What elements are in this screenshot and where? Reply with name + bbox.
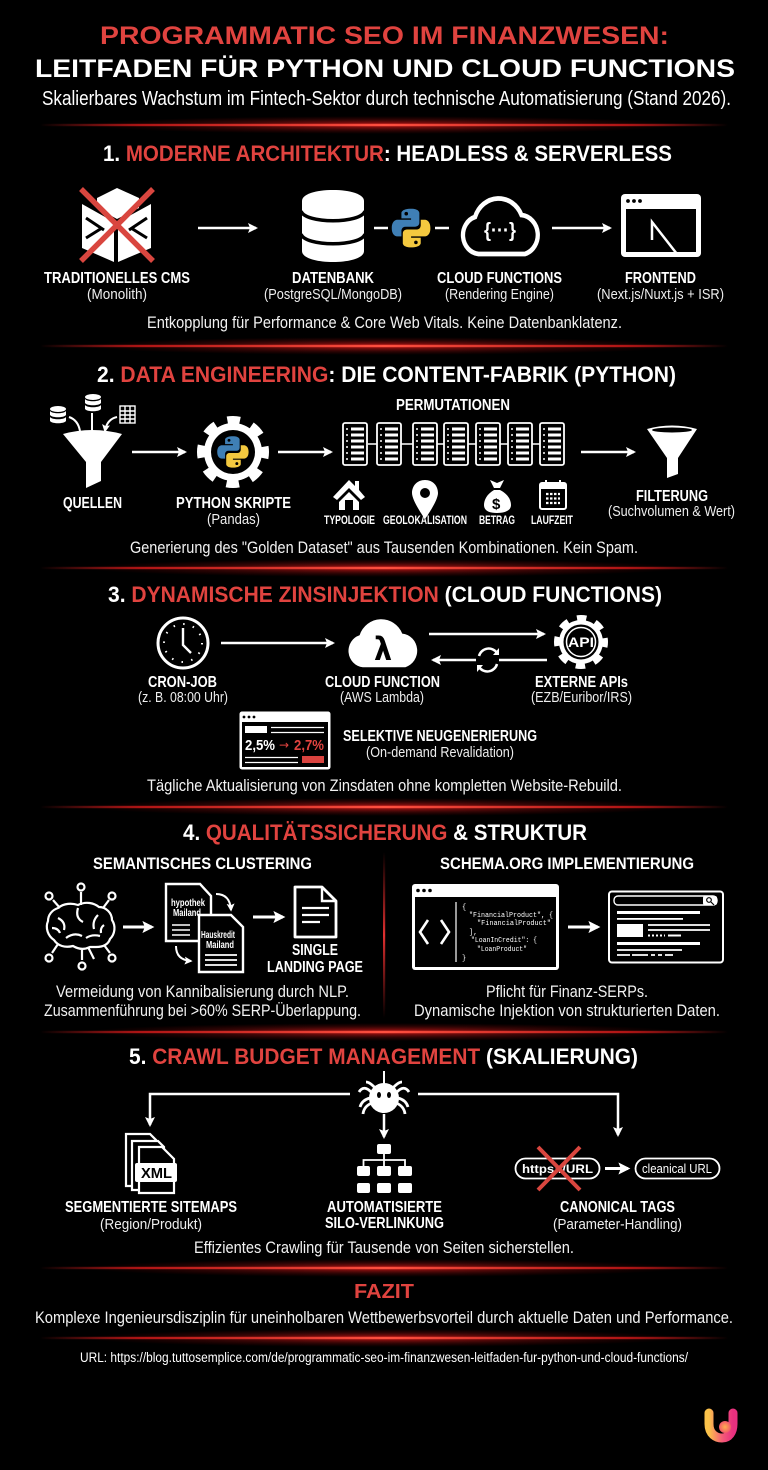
labels: CANONICAL TAGS [560,1199,675,1216]
arrow [198,227,256,229]
text: schema: Dynamische Injektion von strukturierten Daten. [414,1001,720,1020]
labels: (Rendering Engine) [445,287,554,303]
panel: 2 data engineering [50,362,735,557]
icon: search results page [609,892,723,962]
labels: (PostgreSQL/MongoDB) [264,287,402,303]
sub-panel heading: SCHEMA.ORG IMPLEMENTIERUNG [440,854,694,873]
arrow [253,916,283,918]
chart: permutation columns [343,423,564,465]
icon: canonical URL pills: https://URL [522,1162,593,1176]
icon: code browser: ], [469,929,477,937]
labels: (Monolith) [87,287,147,303]
labels: SILO-VERLINKUNG [325,1215,444,1232]
labels: (Parameter-Handling) [553,1217,682,1233]
icon: code browser: "LoanProduct" [477,946,527,954]
labels: (z. B. 08:00 Uhr) [138,690,228,706]
icon: code browser [412,884,559,970]
label: (Suchvolumen & Wert) [608,504,735,520]
labels: (Next.js/Nuxt.js + ISR) [597,287,724,303]
labels: (EZB/Euribor/IRS) [531,690,632,706]
text: clustering [44,982,361,1020]
sub-panel heading: SEMANTISCHES CLUSTERING [93,854,312,873]
labels: AUTOMATISIERTE [327,1199,442,1216]
labels: CLOUD FUNCTION [325,674,440,691]
labels [44,270,724,303]
text: schema: Pflicht für Finanz-SERPs. [486,982,648,1001]
icon: code browser: { [462,904,466,912]
label: LANDING PAGE [267,959,363,976]
panel: 5 crawl budget [65,1044,720,1257]
icon: rate update browser: → [279,738,289,752]
icon: duplicate documents: Hauskredit [201,930,235,941]
labels: FRONTEND [625,270,696,287]
labels: (AWS Lambda) [340,690,424,706]
arrow [568,926,598,928]
icon: calendar [540,480,566,509]
icon: rate update browser: 2,7% [294,738,324,754]
arrow [221,642,333,644]
panel: conclusion [35,1281,733,1327]
icon: database [301,190,365,262]
label: (On-demand Revalidation) [366,745,514,761]
heading 3: 3. DYNAMISCHE ZINSINJEKTION (CLOUD FUNCTIONS) [108,582,662,607]
icon: duplicate documents: hypothek [171,898,205,909]
labels: CRON-JOB [148,674,217,691]
icon: location pin [412,480,438,519]
icon: canonical URL pills [516,1147,720,1190]
summary text: Entkopplung für Performance & Core Web Vitals. Keine Datenbanklatenz. [147,313,622,332]
arrow [552,227,610,229]
heading 4: 4. QUALITÄTSSICHERUNG & STRUKTUR [183,820,587,845]
icon: single document [295,887,336,937]
labels [138,674,632,706]
icon: code browser: } [462,955,466,963]
panel: 4 quality and structure [44,820,723,1020]
labels: SEGMENTIERTE SITEMAPS [65,1199,237,1216]
icon: clock [158,618,208,668]
arrows: API exchange [429,634,547,672]
label: SINGLE [292,942,338,959]
heading 5: 5. CRAWL BUDGET MANAGEMENT (SKALIERUNG) [129,1044,638,1069]
heading: Fazit: FAZIT [354,1281,414,1303]
summary text: Effizientes Crawling für Tausende von Seiten sicherstellen. [194,1238,574,1257]
permutation labels: BETRAG [479,513,515,527]
label: (Pandas) [207,512,260,528]
label: QUELLEN [63,495,122,512]
title: PROGRAMMATIC SEO IM FINANZWESEN: [100,22,669,50]
icon: cloud functions [463,198,538,254]
arrow [278,451,331,453]
icon: rate update browser: 2,5% [245,738,275,754]
icon: lambda cloud: λ [374,630,392,668]
permutation labels: LAUFZEIT [531,513,573,527]
title: LEITFADEN FÜR PYTHON UND CLOUD FUNCTIONS [35,54,735,83]
icon: code browser: "FinancialProduct", { [469,912,553,920]
arrow: right branch [418,1094,618,1135]
connector line [374,227,449,229]
icon: API gear [558,619,604,665]
title [35,22,735,83]
heading 2: 2. DATA ENGINEERING: DIE CONTENT-FABRIK (PYTHON) [97,362,676,387]
labels [65,1199,682,1233]
arrow [123,926,152,928]
label: SELEKTIVE NEUGENERIERUNG [343,728,537,745]
permutation labels: GEOLOKALISATION [383,513,467,527]
icon: crossed monolith CMS [81,188,153,262]
icon: frontend browser [621,194,701,257]
icon: python logo [392,209,430,247]
labels: (Region/Produkt) [100,1217,202,1233]
label: FILTERUNG [636,488,708,505]
icon: silo tree [357,1144,412,1193]
panel: 3 rate injection [108,582,662,795]
icon: cloud functions: {···} [484,220,516,242]
icon: duplicate documents: Mailand [206,940,234,951]
icon: code browser: "FinancialProduct" [477,920,551,928]
icon: sources funnel [50,394,135,488]
label [608,488,735,520]
icon: code browser: "LoanInCredit": { [471,937,537,945]
source URL: URL: https://blog.tuttosemplice.com/de/programmatic-seo-im-finanzwesen-leitfaden-fur-python-und-cloud-functions/ [80,1350,688,1365]
label [176,495,291,528]
logo [709,1413,733,1438]
arrow [132,451,185,453]
labels: DATENBANK [292,270,375,287]
icon: rate update browser [240,712,330,770]
text: schema [414,982,720,1020]
label [343,728,537,761]
icon: house [333,480,365,510]
text: clustering: Zusammenführung bei >60% SERP-Überlappung. [44,1001,361,1020]
icon: API gear: API [568,634,594,650]
icon: brain network [46,884,116,970]
icon: XML sitemap files: XML [141,1165,172,1182]
icon: money bag [484,480,511,513]
labels: EXTERNE APIs [535,674,628,691]
summary text: Generierung des "Golden Dataset" aus Tausenden Kombinationen. Kein Spam. [130,538,638,557]
arrow [581,451,634,453]
icon: python gear [202,421,264,483]
labels: CLOUD FUNCTIONS [437,270,562,287]
arrow: left branch [150,1094,350,1125]
heading 1: 1. MODERNE ARCHITEKTUR: HEADLESS & SERVERLESS [103,141,672,166]
icon: canonical URL pills: cleanical URL [642,1162,712,1176]
permutation labels: TYPOLOGIE [324,513,375,527]
summary text: Tägliche Aktualisierung von Zinsdaten ohne kompletten Website-Rebuild. [147,776,622,795]
icon: XML sitemap files [126,1134,177,1193]
icon: lambda cloud [348,619,417,668]
label: PYTHON SKRIPTE [176,495,291,512]
label [267,942,363,976]
panel: 1 architecture [44,141,724,332]
permutation labels [324,513,573,527]
labels: TRADITIONELLES CMS [44,270,190,287]
icon: duplicate documents: Mailand [173,908,201,919]
text: clustering: Vermeidung von Kannibalisierung durch NLP. [56,982,349,1001]
arrow: center branch [383,1114,385,1137]
icon: filter funnel [647,426,697,478]
icon: duplicate documents [166,884,243,972]
label: permutations: PERMUTATIONEN [396,397,510,414]
icon: money bag: $ [492,496,501,513]
icon: spider [359,1071,409,1114]
